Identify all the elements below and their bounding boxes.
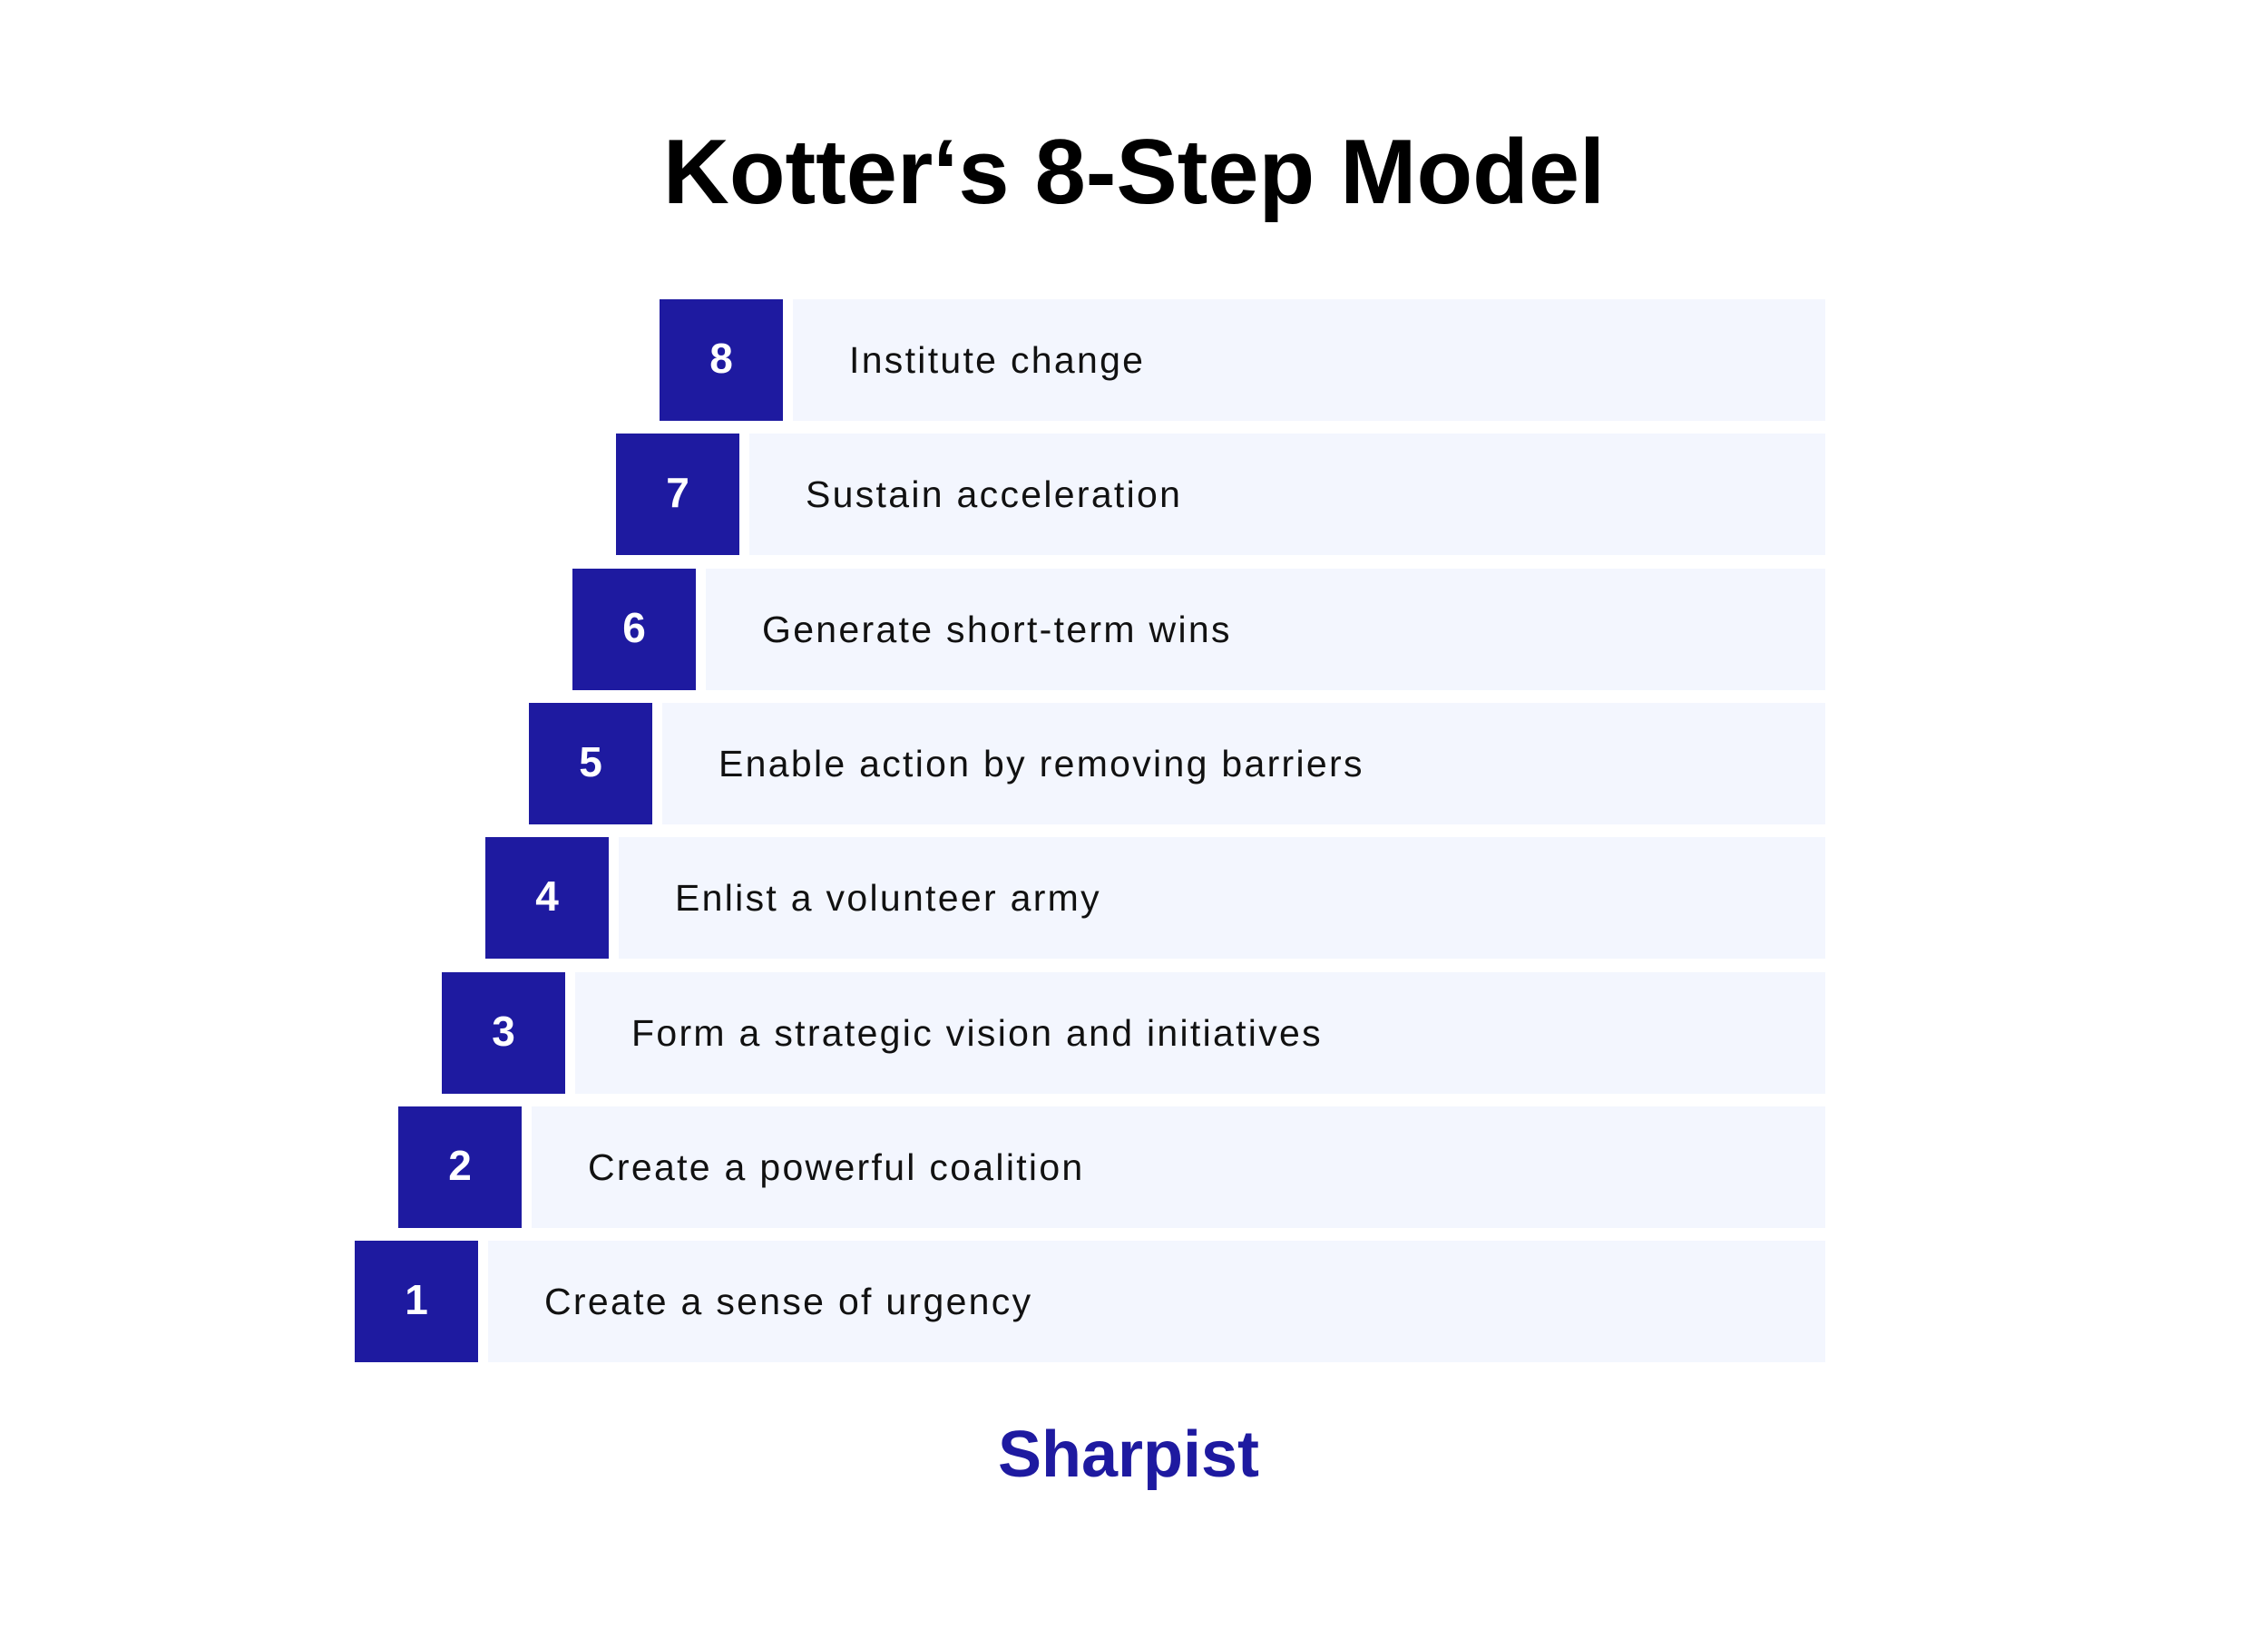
- logo: Sharpist: [998, 1418, 1259, 1491]
- step 1: 1: [405, 1276, 428, 1323]
- step 3: 3: [492, 1008, 515, 1055]
- step 8: 8: [709, 335, 733, 382]
- step 3: Form a strategic vision and initiatives: [631, 1012, 1323, 1054]
- step 7: [616, 434, 1825, 555]
- step 1: Create a sense of urgency: [544, 1281, 1032, 1322]
- step 5: [529, 703, 1825, 824]
- step 3: [442, 972, 1825, 1094]
- step 5: 5: [579, 738, 602, 785]
- step 6: Generate short-term wins: [762, 609, 1232, 650]
- step 8: Institute change: [849, 339, 1145, 381]
- title: Kotter‘s 8-Step Model: [663, 122, 1605, 223]
- step 7: Sustain acceleration: [806, 473, 1182, 515]
- step 5: Enable action by removing barriers: [719, 743, 1364, 785]
- step 4: [485, 837, 1825, 959]
- step 7: 7: [666, 469, 689, 516]
- step 8: [660, 299, 1825, 421]
- step 6: [572, 569, 1825, 690]
- step 4: 4: [535, 872, 559, 920]
- step 2: Create a powerful coalition: [588, 1146, 1085, 1188]
- step 2: 2: [448, 1142, 472, 1189]
- step 1: [355, 1241, 1825, 1362]
- step 6: 6: [622, 604, 646, 651]
- step 4: Enlist a volunteer army: [675, 877, 1101, 919]
- step 2: [398, 1106, 1825, 1228]
